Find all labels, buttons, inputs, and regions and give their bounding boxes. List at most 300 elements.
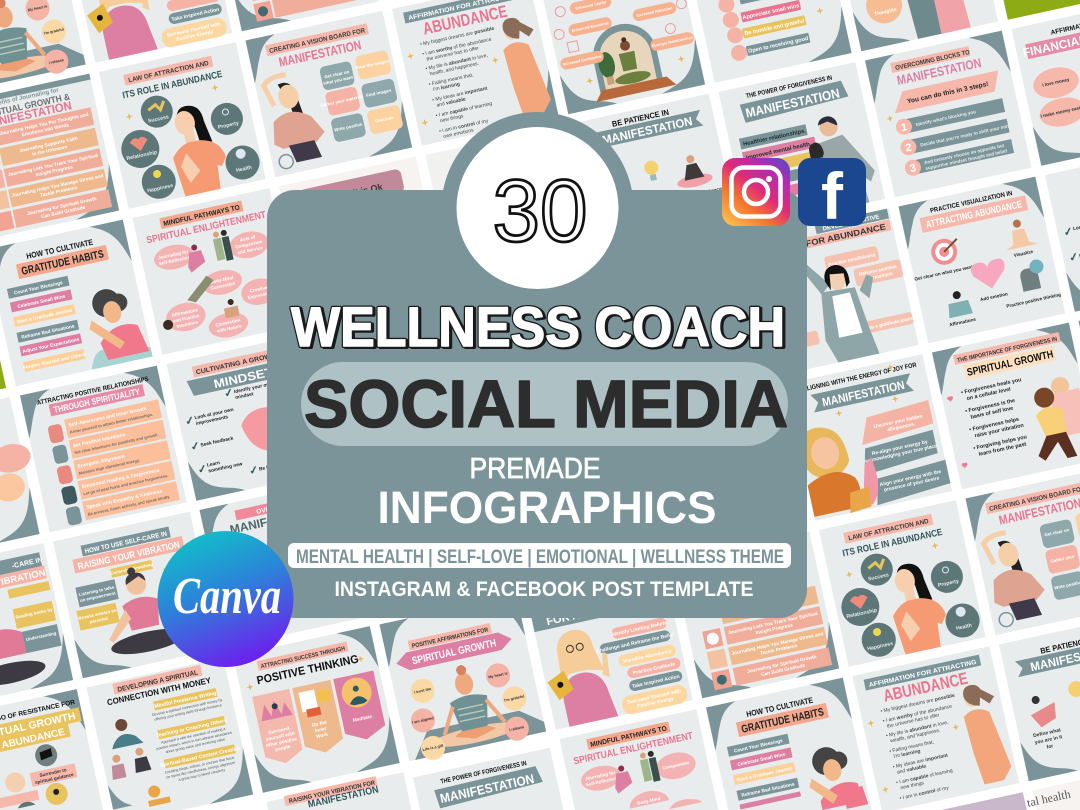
banner: surround yourself: yourself with (265, 731, 295, 743)
figure: woman head (802, 743, 856, 808)
text block: bullet affirmations: • My biggest dreams are possible (420, 26, 495, 48)
list: relationship steps: Know yourself to attract better relationships. (69, 412, 154, 435)
text block: bullets 2: • Failing means that, (889, 739, 934, 755)
icon: meditating man: Visualize (1013, 249, 1034, 258)
icons: abundance circles 2: Health (956, 623, 972, 632)
list: relationship steps: Be present, listen actively, and speak kindly. (87, 494, 171, 517)
heading: gratitude 2: HOW TO CULTIVATE (745, 696, 814, 719)
heading: overcoming blocks: MANIFESTATION (895, 55, 983, 88)
money content: Approach it with the intention of making a (161, 727, 226, 745)
icon: face and ribbon (0, 768, 39, 809)
list: tick items: ✓ (184, 414, 196, 428)
card: overcoming (mostly hidden) (200, 480, 366, 647)
list: gratitude tags: Celebrate Small Wins (17, 294, 66, 310)
card: be patience (bottom right): for (1046, 743, 1054, 751)
affirmation circles top: I release (48, 58, 64, 65)
heading: mindful pathways: SPIRITUAL ENLIGHTENMENT (146, 210, 267, 246)
card: tarot woman bottom: FOR ABUNDANCE (545, 596, 643, 628)
heading: forgiveness bottom: MANIFESTATION (439, 771, 536, 806)
list: journaling bars: Tackle Problems (40, 185, 78, 199)
figure: seated woman (0, 0, 59, 85)
card: law of attraction (99, 42, 266, 209)
benefit tags: Increased Confidence (562, 54, 602, 67)
banner: do the inner work: Do the (312, 720, 328, 729)
card: journaling benefits (left) (0, 74, 119, 240)
card: mindful pathways (bottom) (560, 709, 718, 810)
list: gratitude tags: Adjust Your Expectations (22, 337, 80, 355)
card: overcoming (mostly hidden): OVERCOMING (256, 499, 302, 516)
card: journaling bottom: Journaling Lets You Track Your Spiritual (727, 611, 819, 636)
abundance content (858, 653, 1014, 806)
heading: be patience (585, 101, 703, 150)
heading: positive mindset: DEVELOP POSITIVE (822, 214, 880, 233)
card: self-care (far left): Understanding (25, 630, 57, 642)
card: gratitude habits (bottom) (706, 678, 872, 810)
banners: allegiances. (887, 421, 916, 433)
icon: facebook (798, 158, 866, 233)
list: tick items: something new (208, 461, 243, 474)
bubbles: and Positive (172, 313, 200, 324)
board boxes: Gather your materials (320, 93, 366, 108)
heading: relationships: THROUGH SPIRITUALITY (53, 386, 141, 415)
board boxes: Write positive (334, 121, 363, 133)
card: faint placeholder behind arch (426, 125, 592, 292)
banners: Re-align your energy by (871, 439, 928, 457)
text block: bullets 2: new things (900, 780, 925, 791)
banner: surround yourself: Surround (268, 726, 290, 736)
heading: relationships: ATTRACTING POSITIVE RELATIONSHIPS (36, 376, 150, 407)
heading: aligning: ALIGNING WITH THE ENERGY OF JOY FOR (802, 362, 917, 393)
card: positive thinking (233, 626, 400, 793)
heading: affirmations (392, 619, 513, 673)
card: positive mindset (752, 207, 922, 375)
figure: woman cheering (801, 252, 889, 366)
money content: Creating blogs, videos, or courses that focus (165, 756, 235, 775)
card: spiritual connection with money (86, 658, 253, 810)
affirmation circles: I'm grateful (504, 694, 525, 703)
text block: bullet affirmations: and valuable (436, 96, 467, 109)
bubbles: Compassion (235, 239, 263, 250)
heading: gratitude: HOW TO CULTIVATE (25, 238, 94, 261)
sections (146, 686, 241, 770)
heading and upper bubbles: Compassion (662, 760, 690, 771)
text: template line: INSTAGRAM & FACEBOOK POST TEMPLATE (334, 578, 754, 601)
heading: aligning (802, 362, 922, 414)
heading: visualization (918, 187, 1028, 233)
title: wellness coach: WELLNESS COACH (291, 295, 785, 358)
heading: mindset (184, 345, 299, 397)
bubbles: Self-Reflection (158, 255, 191, 266)
pill: themes: MENTAL HEALTH | SELF-LOVE | EMOTIONAL | WELLNESS THEME (296, 546, 784, 568)
card: forgiveness in spiritual growth (932, 323, 1080, 489)
heading: law of attraction 2: LAW OF ATTRACTION AND (848, 518, 930, 542)
heading: aligning: MANIFESTATION (821, 378, 906, 409)
list: tick items: improvements (195, 414, 229, 427)
banner: do the inner work (292, 680, 345, 757)
text block: bullets 2: • My ideas are important (892, 753, 949, 770)
card: olive green (top right) (978, 0, 1080, 20)
bubbles: Keep a gratitude journal (862, 315, 917, 332)
heading: money: DEVELOPING A SPIRITUAL (117, 669, 199, 694)
heading: gratitude: GRATITUDE HABITS (20, 248, 105, 278)
figure: woman with cards (538, 624, 620, 729)
money content (93, 660, 244, 796)
text block: bullets 2: • I am capable of learning (896, 768, 953, 786)
list: journaling bars: Journaling Supports Faith (19, 136, 78, 154)
heading: overcoming blocks: OVERCOMING BLOCKS TO (895, 49, 970, 72)
heading: infographics: INFOGRAPHICS (378, 482, 716, 533)
heading: positive thinking: POSITIVE THINKING (256, 653, 360, 687)
tags: Listening to talks (78, 584, 115, 597)
banner: surround yourself: other positive (266, 736, 298, 749)
money content: positive impact, which in turn attracts abundance (156, 731, 233, 751)
figure: woman with cards top (77, 0, 160, 62)
card: affirmations circles (top left) (0, 0, 86, 97)
corner: bottom left blob (108, 781, 133, 810)
bubbles: Body-Mind (210, 275, 234, 285)
icons: abundance circles (111, 77, 263, 205)
heading: manifestation: MANIFESTATION (307, 784, 380, 810)
list: 3 steps (894, 95, 1024, 177)
list: tick items: ✓ (197, 463, 208, 477)
text block: bullets 2: • My biggest dreams are possible (880, 693, 956, 715)
card: it is ok (off-white): It is Ok (352, 181, 384, 198)
tags: Visualize Abundance (622, 648, 672, 665)
card: appreciate small wins: Open to receiving good (748, 36, 809, 55)
list: tick items (180, 375, 303, 489)
figure: person at desk (145, 783, 171, 807)
bubbles: with Nature (216, 323, 242, 334)
heading: forgiveness bottom (432, 757, 544, 809)
heading: mindset: CULTIVATING A GROWTH (195, 351, 281, 376)
bubbles: Creative (249, 285, 268, 294)
list: gratitude tags: Reframe Bad Situations (21, 323, 75, 341)
banner: surround yourself (252, 689, 305, 767)
list: 3 steps: 2 (904, 142, 913, 155)
text block: bullet affirmations: new things (439, 113, 465, 124)
affirmation circles: Life is a gift (422, 744, 444, 752)
card: vision board (lower right): Gather your (1050, 554, 1076, 564)
card: power of forgiveness (bottom) (413, 748, 563, 810)
bubbles: and Service (237, 245, 264, 255)
list: journaling bars: Insight Progress (35, 164, 74, 178)
text block: bullet affirmations: • My life is abundant in love, (425, 53, 488, 72)
list: relationship steps: Emotional Healing & Forgiveness (81, 467, 160, 490)
list: gratitude tags: Count Your Blessings (14, 280, 64, 296)
card: financial affirmations: I love money (1042, 77, 1070, 88)
icon: affirmations person (943, 288, 977, 327)
card: be patience (bottom right): you are in it (1034, 734, 1063, 746)
card: attracting positive relationships (20, 366, 187, 532)
bubbles: Practice mindfulness (828, 252, 877, 268)
affirmation circles (402, 658, 535, 763)
tags: Practice Gratitude (632, 661, 676, 676)
card: mindful pathways (132, 188, 299, 355)
icon: facebook: f (821, 159, 844, 233)
heading: forgiveness: MANIFESTATION (744, 85, 841, 121)
card: green left edge (0, 251, 6, 418)
text block: bullet affirmations: • My ideas are important (432, 86, 488, 103)
money content: a great way to blend creativity (178, 768, 226, 782)
figures (146, 229, 246, 332)
icons: abundance circles 2: Relationship (846, 608, 878, 620)
card: overcoming (mostly hidden): MANIFESTATION (229, 502, 326, 537)
list: tick items: ✓ (223, 387, 235, 400)
sections: Spiritual-Based Content Creation (160, 746, 240, 769)
card: self-care (far left) (0, 543, 73, 710)
card: journaling bottom: Journaling Helps You Manage Stress and (731, 631, 824, 657)
card: gratitude habits (0, 220, 153, 386)
card: financial affirmations (1012, 0, 1080, 166)
list: gratitude tags: Forgive Yourself and Others (22, 352, 87, 371)
text block: bullets 2: • I am worthy of the abundance (882, 704, 953, 724)
icon: heart: Add emotion (980, 291, 1008, 302)
list: 3 steps: Decide that you're ready to shift your mindset (920, 121, 1019, 148)
text block: forgiveness bullets: on a cellular level (966, 387, 1012, 402)
figures: couples (47, 423, 83, 526)
heading and upper bubbles: Journaling for (585, 770, 616, 781)
heading: abundance 2: ABUNDANCE (882, 669, 970, 706)
heading: law of attraction: LAW OF ATTRACTION AND (128, 60, 210, 84)
heading: money: CONNECTION WITH MONEY (106, 675, 212, 707)
card: growth mindset (166, 334, 333, 501)
list: tick items: Be kind to yourself (259, 457, 302, 473)
subtitle: premade: PREMADE (470, 453, 600, 485)
heading: positive mindset: MINDSET FOR ABUNDANCE (761, 221, 887, 258)
heading: visualization: ATTRACTING ABUNDANCE (925, 199, 1023, 231)
text block: bullet affirmations (420, 26, 515, 141)
sections: Teaching or Coaching Others (156, 718, 228, 739)
money content: about giving value and receiving value (165, 737, 226, 754)
heading and upper bubbles: Self-Reflection (585, 776, 618, 787)
tags: personal (89, 616, 108, 624)
upper content: gratitude (706, 678, 864, 803)
list: tick items: ✓ (190, 440, 201, 454)
board boxes: Decorate (375, 115, 395, 124)
tag: cut-off pink bar (739, 791, 801, 809)
card: raising vibration for manifestation (266, 772, 412, 810)
text block: bullet affirmations: • Failing means that, (428, 72, 474, 88)
banners: Align your energy with the (879, 469, 942, 488)
banners: acknowledging your true place (865, 443, 938, 465)
list: relationship steps: Let go of past hurts and practice forgiveness. (83, 473, 169, 496)
heading: abundance 2: AFFIRMATION FOR ATTRACTING (868, 659, 977, 689)
corner: bottom right blob (200, 748, 253, 804)
figure: hugging couple (1023, 373, 1080, 464)
arch with seated woman (581, 15, 676, 102)
list: tick items: Seek feedback (200, 435, 234, 449)
affirmation circles top: My heart is (27, 4, 48, 12)
card: couple and thoughts (832, 0, 998, 51)
list: journaling bars: Journaling Helps You Manage Stress and (11, 173, 104, 199)
text block: bullets 2 (880, 693, 975, 802)
heading: abundance 2 (864, 655, 985, 709)
icon: target (907, 234, 974, 282)
benefit tags: Enhanced Emotional (571, 21, 609, 33)
banners: Uncover your hidden (873, 414, 923, 430)
heading: vision board: MANIFESTATION (277, 37, 363, 70)
bubble: body-mind (627, 787, 669, 809)
heading: be patience: BE PATIENCE IN (611, 108, 670, 129)
heading: gratitude 2 (734, 693, 829, 737)
list: tick items: Look at your own (194, 407, 234, 421)
card: journaling benefits top strip (212, 0, 379, 31)
figure: blonde woman (796, 417, 884, 521)
badge circle with 30 (456, 127, 618, 289)
heading: spiritual growth: THE IMPORTANCE OF FORGIVENESS IN (957, 337, 1058, 364)
main panel (267, 112, 807, 618)
card: journaling bottom: Journaling for Spiritual Growth (747, 654, 817, 675)
list: forgiveness benefits: Improved mental health. (746, 141, 812, 162)
tags (69, 551, 204, 631)
card: meditation with arch (538, 0, 705, 114)
card: journaling bottom: Tackle Problems (760, 643, 798, 657)
money content: on topics like mindfulness, energy alignment (166, 761, 236, 780)
text block: bullet affirmations: I'm learning (433, 81, 461, 93)
text block: bullets 2: • My life is abundant in love, (885, 720, 949, 739)
card: abundance affirmation (bottom right) (852, 646, 1019, 810)
benefit tags: Stronger Relationships (651, 36, 693, 48)
upper content: gratitude: Start a Gratitude Journal (737, 766, 793, 783)
icon: yellow circle (44, 781, 70, 807)
card: appreciate small wins: Appreciate small wins (742, 3, 800, 21)
heading: self-care (70, 524, 185, 573)
affirmation circles: I am aligned (412, 716, 435, 725)
banner: meditate: Meditate (352, 714, 373, 724)
card: it is ok (off-white) (279, 157, 446, 323)
heading: spiritual growth: SPIRITUAL GROWTH (966, 348, 1054, 379)
heading: law of attraction: ITS ROLE IN ABUNDANCE (121, 69, 223, 101)
figure: woman posing (260, 69, 330, 166)
bubbles: Expression (247, 290, 273, 300)
list: relationship steps: Speak with Empathy & Kindness (86, 488, 163, 511)
figure: couple (799, 109, 881, 213)
bubble: creative expression (668, 796, 702, 809)
bubbles: Connection (210, 281, 236, 291)
benefit tags: Increased Attraction (636, 6, 673, 18)
tags: Conscious breathing (110, 562, 154, 576)
icon: target: Get clear on what you want (914, 264, 974, 282)
heading: resistance (0, 689, 95, 798)
text block: bullet affirmations: • I am capable of learning (435, 101, 493, 119)
tags: Positive Energy (636, 696, 675, 710)
callout: steps banner (891, 70, 1002, 113)
icons: abundance circles 2 (831, 535, 983, 663)
list: journaling bars: Emotions into Words (21, 122, 70, 138)
tags: on empowerment (79, 590, 117, 603)
card: be patience (bottom right): Define what (1033, 727, 1062, 739)
text block: bullet affirmations: health, and happiness. (429, 61, 480, 77)
icons: abundance circles: Happiness (147, 183, 174, 194)
list: 3 steps: supportive mindset thought and belief (925, 148, 1008, 171)
list: journaling bars: Can Build Gratitude (41, 205, 86, 220)
list: journaling bars: in the Unknown (32, 144, 68, 158)
title: wellness coach: WELLNESS COACH (291, 295, 785, 358)
text block: forgiveness bullets: basis of self love (970, 406, 1014, 421)
affirmation circles: I trust the (414, 687, 432, 695)
text block: bullets 2: • I am in control of my (899, 785, 950, 802)
icon: affirmations person: Affirmations (949, 317, 977, 327)
tags: Identify Limiting Beliefs (611, 620, 668, 638)
icons: abundance circles 2: Property (937, 578, 960, 589)
list: relationship steps: Self-Awareness and Inner Growth (68, 406, 147, 429)
text block: bullet affirmations: own emotions (443, 127, 475, 140)
heading: visualization: PRACTICE VISUALIZATION IN (930, 190, 1013, 215)
banner: do the inner work: Inner (314, 726, 327, 734)
figure: meditating woman (417, 656, 520, 752)
tags: Challenge and Reframe the Belief (596, 632, 675, 655)
card: be patience (572, 94, 739, 260)
list: gratitude tags (6, 275, 87, 372)
card: practice visualization (898, 177, 1065, 343)
list: tick items: Learn (206, 460, 221, 469)
list: tick items: Identify your own (233, 381, 274, 395)
card: couple and thoughts: Thoughts (874, 7, 898, 18)
text block: forgiveness bullets: • Forgiveness is the (965, 398, 1016, 415)
heading: self-care: RAISING YOUR VIBRATION (77, 540, 181, 573)
card: vision board (lower right): Get clear on (1044, 527, 1070, 537)
list: forgiveness benefits: Healthier relationships. (743, 128, 807, 148)
affirmation circles top: I'm grateful (44, 27, 64, 36)
heading: forgiveness: THE POWER OF FORGIVENESS IN (745, 75, 833, 100)
pill: social media: SOCIAL MEDIA (304, 367, 788, 442)
bubbles: Intentions (176, 319, 199, 329)
heading: forgiveness (738, 72, 849, 123)
bubble: body-mind: Body-Mind (637, 796, 661, 806)
list: 3 steps: 3 (909, 162, 917, 175)
heading: resistance: Surrender to (39, 767, 67, 778)
heading: vision board 2 (985, 481, 1080, 530)
list: relationship steps (64, 399, 180, 520)
list: 3 steps: 1 (900, 121, 908, 134)
list: journaling bars: Journaling Lets You Track Your Spiritual (7, 153, 99, 178)
money content: offering your writing skills through freelance (154, 703, 222, 722)
icons: abundance circles: Property (217, 120, 240, 131)
heading: positive mindset (756, 209, 892, 259)
heading: law of attraction 2: ITS ROLE IN ABUNDANCE (841, 527, 943, 559)
icon: meditating man (1000, 216, 1040, 259)
bubbles: Connection (215, 317, 241, 328)
heading: law of attraction (118, 54, 223, 101)
card: how to use self-care (53, 512, 220, 678)
board boxes: Get clear on (324, 69, 350, 79)
icons: abundance circles 2: Happiness (867, 641, 894, 652)
card: mental health off-white (1026, 761, 1080, 810)
icon: instagram (722, 158, 790, 226)
heading and upper bubbles: MINDFUL PATHWAYS TO (590, 725, 668, 749)
logo: canva (158, 531, 294, 667)
affirmation circles: My heart is (488, 671, 508, 679)
icons: patience (643, 148, 714, 196)
board boxes: Find the images (356, 58, 390, 70)
figure: ponytail woman 2 (957, 680, 1014, 786)
card: tarot woman (top): Surround Yourself with (166, 21, 221, 39)
tags: Take Inspired Action (632, 674, 680, 690)
figure: woman body (818, 779, 864, 810)
card: positive affirmations for spiritual growth (380, 595, 547, 765)
text block: forgiveness bullets: • Forgiveness helps (969, 417, 1020, 433)
card: vision board (lower right) (966, 469, 1080, 635)
list: relationship steps: Set Positive Intentions (72, 432, 126, 449)
card: law of attraction (lower right) (819, 500, 986, 667)
text block: forgiveness bullets: raise your vibration (974, 423, 1024, 439)
icons: abundance circles: Success (148, 114, 169, 125)
card: self-care (far left): -CARE IN (11, 557, 43, 570)
icons: abundance circles 2: Success (868, 572, 889, 583)
figure: woman with ponytail (497, 13, 553, 119)
banner: meditate (333, 670, 387, 744)
list: relationship steps: Set clear intentions for positivity and growth. (74, 432, 159, 455)
